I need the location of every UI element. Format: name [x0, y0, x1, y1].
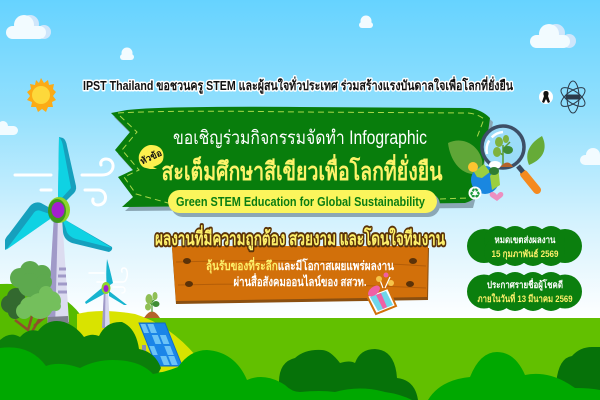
top blade	[58, 137, 76, 205]
heading: top line: IPST Thailand ขอชวนครู STEM และผู้สนใจทั่วประเทศ ร่วมสร้างแรงบันดาลใจเพื่อโลกที่ยั่งยืน	[83, 76, 513, 94]
deadline label: หมดเขตส่งผลงาน	[494, 235, 556, 246]
icon: gift box	[366, 272, 396, 314]
right dark bushes	[279, 347, 600, 400]
magnifier handle	[524, 174, 537, 190]
illustration: earth, leaves and magnifier: ♻	[470, 188, 480, 200]
seedling in lens	[497, 142, 510, 165]
icon: IPST atom logo	[558, 81, 588, 113]
sign text line 2: ผ่านสื่อสังคมออนไลน์ของ สสวท.	[234, 273, 366, 289]
wind lines	[15, 159, 127, 293]
earth globe	[471, 166, 499, 194]
illustration: earth, leaves and magnifier	[448, 126, 545, 201]
panel: wooden sign	[155, 225, 445, 304]
sign text line 1: ลุ้นรับของที่ระลึกและมีโอกาสเผยแพร่ผลงาน	[206, 257, 394, 274]
tree	[1, 261, 61, 335]
small wind turbine	[85, 259, 127, 328]
ground	[0, 318, 600, 400]
big leaf	[448, 140, 482, 174]
banner line 2: สะเต็มศึกษาสีเขียวเพื่อโลกที่ยั่งยืน	[162, 154, 442, 186]
panel: deadline badge	[467, 226, 582, 266]
left blade	[5, 202, 50, 250]
panel: green title banner	[111, 107, 493, 217]
magnifier lens	[482, 126, 524, 168]
dark green bushes	[0, 321, 161, 380]
announcement date: ภายในวันที่ 13 มีนาคม 2569	[478, 291, 572, 305]
panel: announcement badge	[467, 272, 582, 311]
subtitle pill	[168, 190, 437, 213]
foreground green bushes	[0, 347, 600, 400]
icon: sun	[27, 78, 56, 112]
heart	[490, 192, 503, 201]
tower	[47, 215, 69, 330]
right leaf	[527, 136, 545, 165]
large wind turbine	[5, 137, 112, 335]
banner line 1: ขอเชิญร่วมกิจกรรมจัดทำ Infographic	[173, 128, 427, 149]
clouds	[0, 15, 600, 165]
subtitle pill shadow	[171, 193, 440, 217]
solar panel	[139, 323, 182, 366]
subtitle pill: Green STEM Education for Global Sustainability	[176, 194, 426, 209]
right blade	[62, 218, 112, 252]
sign heading: ผลงานที่มีความถูกต้อง สวยงาม และโดนใจทีมงาน	[155, 225, 445, 251]
deadline date: 15 กุมภาพันธ์ 2569	[492, 248, 558, 260]
recycle badge	[468, 186, 482, 200]
icon: mourning ribbon	[539, 90, 553, 104]
announcement label: ประกาศรายชื่อผู้โชคดี	[487, 277, 563, 292]
yellow hill	[77, 311, 196, 372]
speech bubble label: หัวข้อ	[139, 148, 163, 166]
back hill	[0, 284, 92, 350]
icon: seedling on soil	[144, 292, 160, 318]
sky background	[0, 0, 600, 320]
mini sun	[468, 162, 478, 172]
hub	[48, 197, 70, 223]
